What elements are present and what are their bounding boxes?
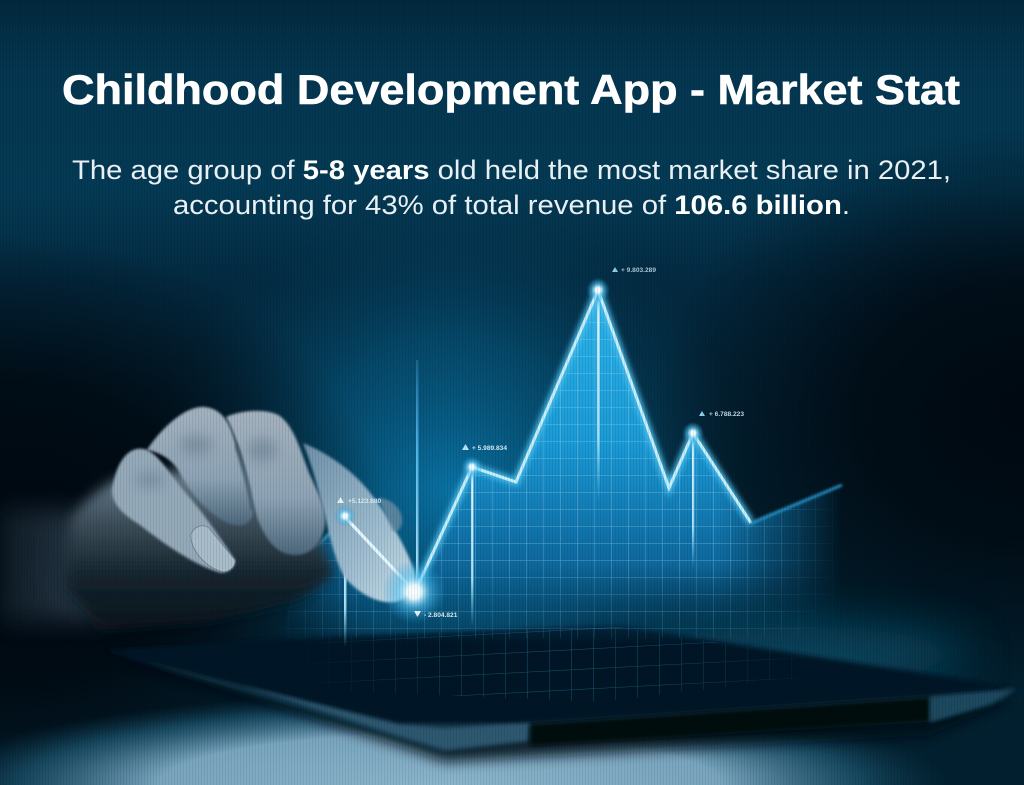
line over index finger	[345, 517, 415, 592]
little finger	[112, 449, 235, 573]
label: 5.123.880	[337, 497, 382, 505]
line glow	[345, 290, 751, 592]
line left tail	[278, 517, 345, 567]
middle finger	[147, 407, 253, 525]
knuckle shading	[136, 435, 277, 487]
subtitle line 2: accounting for 43% of total revenue of 106.6 billion .	[173, 190, 850, 220]
table reflection	[0, 600, 1024, 785]
tablet shadow	[110, 655, 1010, 762]
line	[345, 290, 751, 592]
tablet right corner	[930, 688, 1016, 722]
index finger	[303, 443, 415, 602]
finger gap shading	[236, 445, 252, 510]
tablet screen grid	[314, 627, 803, 702]
thumb tip	[378, 498, 402, 532]
floor grid	[260, 610, 800, 638]
chart area fill	[290, 298, 836, 638]
vertical drop lines	[344, 290, 694, 647]
third finger	[226, 411, 325, 555]
tablet	[105, 626, 1016, 762]
label: 6.788.223: + 6.788.223	[709, 411, 744, 418]
hand	[0, 407, 415, 630]
tablet dark side	[530, 697, 930, 746]
label: 2.804.821: - 2.804.821	[424, 612, 458, 619]
label: 2.804.821	[414, 611, 458, 619]
line right tail	[751, 485, 842, 523]
arm	[0, 508, 110, 622]
label: 5.989.834	[462, 444, 507, 452]
label: 9.803.289: + 9.803.289	[621, 267, 656, 274]
touch point burst	[382, 560, 446, 624]
palm	[66, 470, 335, 630]
tablet side highlight	[105, 650, 530, 750]
fingernail	[191, 526, 235, 572]
chart value labels	[337, 267, 744, 619]
label: 5.989.834: + 5.989.834	[472, 445, 507, 452]
title: Childhood Development App - Market Stat	[62, 66, 960, 113]
tablet screen	[105, 626, 1016, 722]
glowing data points	[334, 278, 704, 624]
subtitle line 1: The age group of 5-8 years old held the most market share in 2021,	[72, 155, 951, 185]
chart grid	[291, 302, 832, 637]
line chart	[260, 280, 870, 650]
subtitle	[72, 155, 951, 220]
tablet edge	[105, 650, 1016, 752]
label: 5.123.880: +5.123.880	[348, 498, 382, 505]
